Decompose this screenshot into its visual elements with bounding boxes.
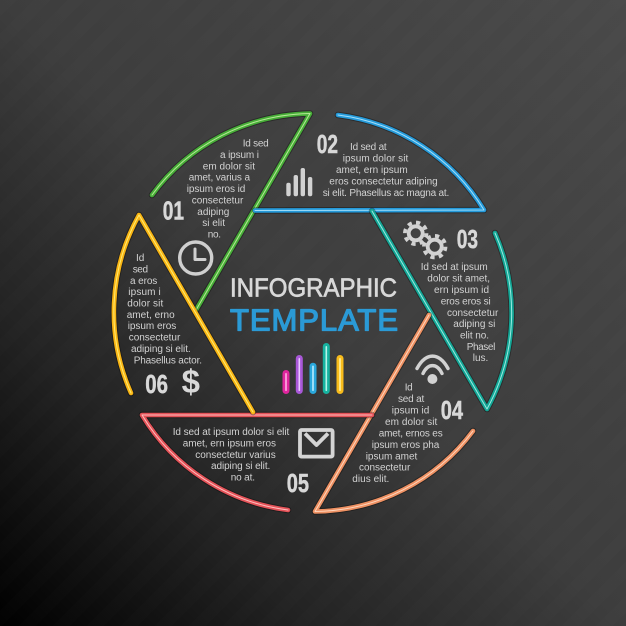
segment 04: orange outline <box>315 315 473 512</box>
text block 02: Id sed at <box>350 142 387 153</box>
number 04: 04 <box>441 395 463 425</box>
text block 05: Id sed at ipsum dolor si elit <box>173 427 290 438</box>
text block 06: a eros <box>130 276 157 287</box>
text block 05: adiping si elit. <box>211 461 270 472</box>
title: INFOGRAPHIC <box>230 275 397 303</box>
text block 02: eros consectetur adiping <box>329 176 438 188</box>
text block 03: consectetur <box>447 308 499 319</box>
text block 03: ern ipsum id <box>434 285 489 296</box>
text block 01: ipsum eros id <box>187 184 245 195</box>
text block 01: amet, varius a <box>189 173 250 184</box>
number 05: 05 <box>287 468 309 498</box>
text block 04: Id <box>405 383 413 394</box>
icon: clock <box>180 242 212 274</box>
text block 04: sed at <box>398 394 425 405</box>
text block 06: dolor sit <box>127 298 164 310</box>
segment 05: red outline <box>142 415 372 510</box>
segment 01: green outline <box>152 114 310 310</box>
number 01: 01 <box>163 195 184 225</box>
icon: dollar: $ <box>182 363 200 400</box>
text block 06: amet, erno <box>127 310 175 321</box>
text block 06: ipsum eros <box>128 321 176 332</box>
text block 01: consectetur <box>192 196 244 206</box>
text block 05: no at. <box>231 472 255 484</box>
text block 03: Phasel <box>467 342 495 353</box>
icon: wifi <box>417 356 448 384</box>
chart: neon bars <box>282 343 344 394</box>
text block 01: adiping <box>197 207 229 218</box>
text block 06: consectetur <box>129 332 181 344</box>
text block 02 <box>323 142 449 199</box>
text block 01 <box>187 139 269 240</box>
text block 06: Id <box>136 253 144 264</box>
segment 03: teal outline <box>372 211 512 409</box>
text block 06: ipsum i <box>128 287 161 298</box>
text block 03: elit no. <box>460 330 489 342</box>
text block 02: amet, ern ipsum <box>336 165 408 176</box>
icon: envelope <box>300 430 333 457</box>
text block 04: ipsum id <box>392 406 429 416</box>
text block 04 <box>352 383 443 485</box>
text block 06: adiping si elit. <box>131 344 191 355</box>
segment 02: blue outline <box>255 115 484 210</box>
text block 04: ipsum eros pha <box>372 440 440 451</box>
text block 03: eros eros si <box>441 296 491 308</box>
icon: bar chart <box>286 168 312 196</box>
text block 05: amet, ern ipsum eros <box>183 438 276 450</box>
text block 03: Id sed at ipsum <box>421 262 488 273</box>
text block 05: consectetur varius <box>195 450 276 461</box>
text block 01: em dolor sit <box>203 162 255 172</box>
number 03: 03 <box>457 224 478 254</box>
text block 02: ipsum dolor sit <box>343 154 409 164</box>
text block 01: si elit <box>202 218 225 229</box>
text block 01: no. <box>208 230 221 240</box>
text block 03: adiping si <box>453 319 495 330</box>
text block 04: amet, ernos es <box>379 428 443 440</box>
text block 03 <box>421 262 499 364</box>
number 06: 06 <box>145 369 168 399</box>
text block 04: ipsum amet <box>366 452 418 462</box>
text block 06 <box>127 253 202 366</box>
text block 06: sed <box>133 264 148 276</box>
number 02: 02 <box>317 129 338 159</box>
text block 01: Id sed <box>243 139 269 150</box>
text block 02: si elit. Phasellus ac magna at. <box>323 188 449 199</box>
text block 06: Phasellus actor. <box>134 356 202 366</box>
text block 03: lus. <box>473 353 488 364</box>
text block 05 <box>173 427 290 484</box>
title <box>230 275 398 338</box>
title: TEMPLATE <box>230 302 398 338</box>
text block 04: dius elit. <box>352 474 389 485</box>
segment 06: yellow outline <box>114 215 253 412</box>
icon: gears <box>405 222 446 258</box>
text block 03: dolor sit amet, <box>427 274 490 284</box>
text block 04: em dolor sit <box>385 417 438 428</box>
text block 04: consectetur <box>359 462 411 474</box>
text block 01: a ipsum i <box>220 150 259 161</box>
